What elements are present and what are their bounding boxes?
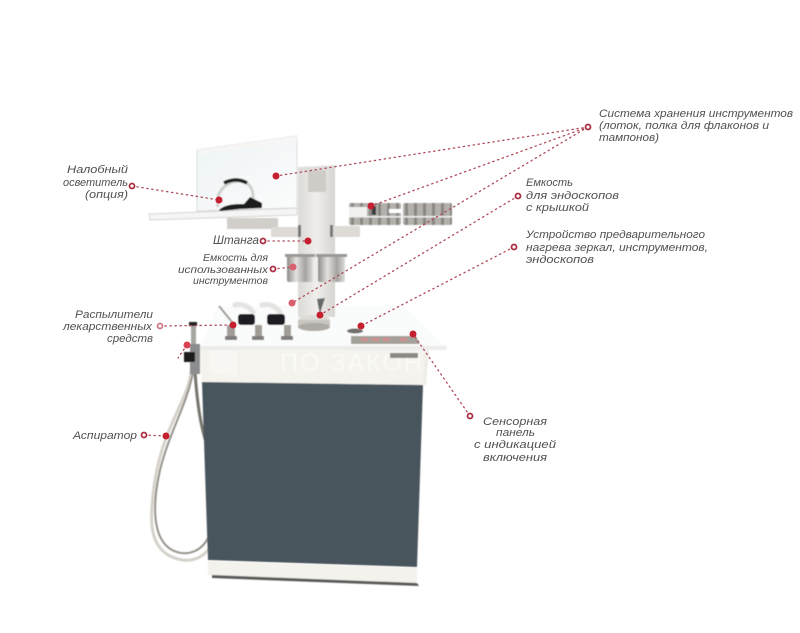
instrument unit xyxy=(149,136,452,586)
label: touch panel: панель xyxy=(496,427,535,439)
aspirator hoses xyxy=(152,372,208,560)
arms xyxy=(271,225,360,237)
label: endoscope container: Емкость xyxy=(526,177,573,189)
label: touch panel: Сенсорная xyxy=(483,416,547,428)
cabinet upper body xyxy=(198,349,425,385)
callout markers xyxy=(162,172,416,440)
label rings xyxy=(130,124,590,438)
label: storage system: (лоток, полка для флаконов и xyxy=(599,120,769,132)
label: medicine sprayers: Распылители xyxy=(75,309,153,321)
touch display panel xyxy=(351,336,420,344)
aspirator handle xyxy=(184,322,200,374)
label: touch panel: с индикацией xyxy=(474,439,556,451)
label: preheating device: нагрева зеркал, инструментов, xyxy=(526,242,708,254)
label: head light: (опция) xyxy=(85,189,128,201)
watermark xyxy=(209,349,424,377)
label: preheating device: эндоскопов xyxy=(526,254,594,266)
instrument tray xyxy=(349,203,452,225)
label: storage system: тампонов) xyxy=(599,132,659,144)
spray nozzles xyxy=(219,304,293,340)
head light panel xyxy=(197,136,297,211)
label: endoscope container: для эндоскопов xyxy=(526,190,619,202)
label: head light: Налобный xyxy=(67,164,128,176)
label: used instrument container xyxy=(178,252,269,287)
column xyxy=(298,165,337,317)
label: storage system xyxy=(599,108,793,144)
watermark: ПО ЗАКОН xyxy=(280,349,424,377)
label: used instrument container: Емкость для xyxy=(203,252,268,264)
shelf xyxy=(149,208,297,220)
label: used instrument container: инструментов xyxy=(193,275,269,287)
label: medicine sprayers: средств xyxy=(107,333,153,345)
label: endoscope container xyxy=(526,177,619,214)
label: head light xyxy=(63,164,128,201)
label: medicine sprayers xyxy=(62,309,153,345)
preheating device xyxy=(347,328,363,334)
name plate xyxy=(390,353,418,358)
dark front door xyxy=(202,382,423,567)
head lamp xyxy=(218,180,262,211)
label: storage system: Система хранения инструментов xyxy=(599,108,793,120)
shelf bracket xyxy=(227,218,278,229)
label: touch panel xyxy=(474,416,556,464)
label: head light: осветитель xyxy=(63,177,128,189)
table top xyxy=(199,305,447,350)
used instrument containers xyxy=(285,254,347,282)
label: rod: Штанга xyxy=(213,233,259,247)
endoscope container xyxy=(298,298,330,331)
label: touch panel: включения xyxy=(483,452,547,464)
leader lines xyxy=(132,127,588,436)
cabinet base xyxy=(208,561,417,583)
label: endoscope container: с крышкой xyxy=(526,202,589,214)
side edge xyxy=(423,349,429,385)
label: preheating device xyxy=(525,229,708,266)
label: medicine sprayers: лекарственных xyxy=(62,321,153,333)
label: preheating device: Устройство предварительного xyxy=(525,229,705,241)
label: aspirator: Аспиратор xyxy=(72,430,137,442)
label: used instrument container: использованных xyxy=(178,264,269,276)
